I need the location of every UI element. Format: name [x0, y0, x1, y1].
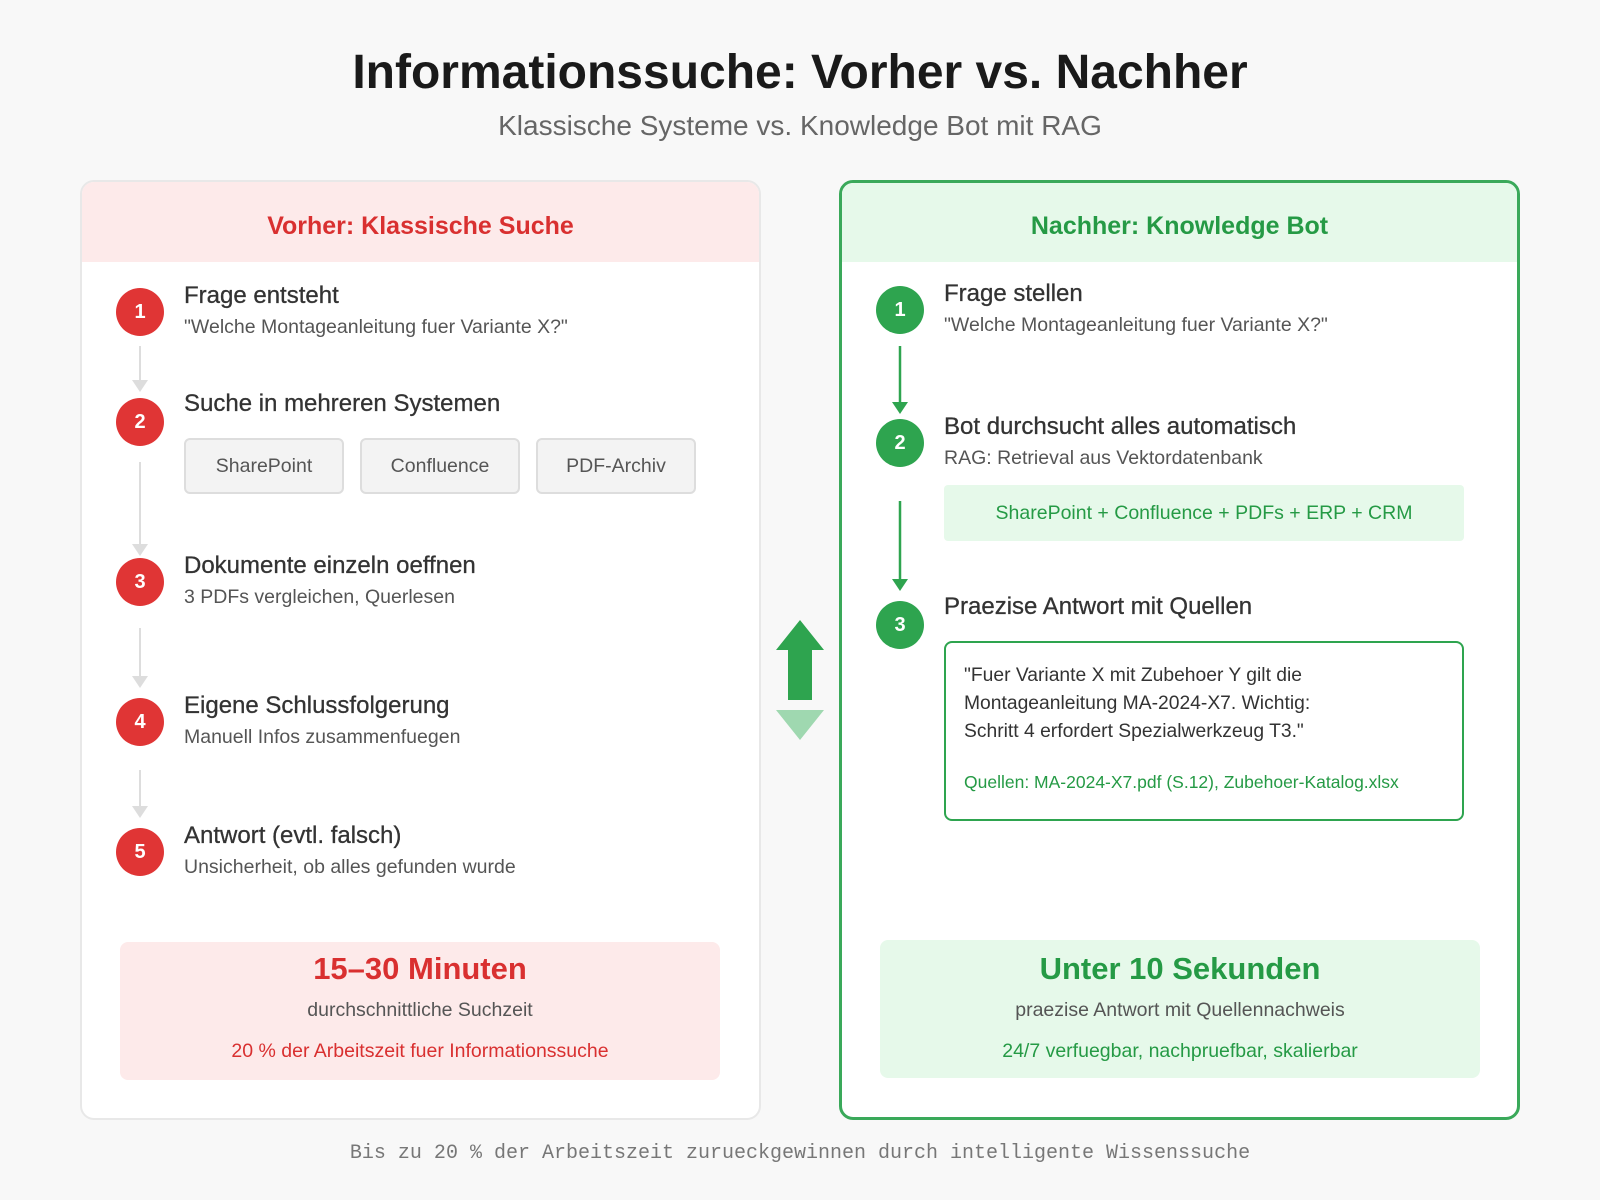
pills: SharePoint: [216, 455, 312, 477]
step 4: Eigene Schlussfolgerung: [184, 692, 450, 719]
header: vorher: Vorher: Klassische Suche: [267, 212, 574, 240]
step 2: Confluence: [391, 455, 489, 477]
step 2: Suche in mehreren Systemen: [184, 390, 500, 417]
answer box: "Fuer Variante X mit Zubehoer Y gilt die: [964, 665, 1302, 686]
title: Informationssuche: Vorher vs. Nachher: [352, 46, 1248, 99]
arrow 3-4: [132, 628, 148, 688]
step 3: 3: [894, 614, 906, 636]
step 2: 2: [134, 411, 146, 433]
step 2: 2: [894, 432, 906, 454]
step 1: 1: [894, 299, 906, 321]
step 2: RAG: Retrieval aus Vektordatenbank: [944, 447, 1263, 469]
step 5: Antwort (evtl. falsch): [184, 822, 401, 849]
step 3: 3 PDFs vergleichen, Querlesen: [184, 586, 455, 608]
step 4: Manuell Infos zusammenfuegen: [184, 726, 460, 748]
step 1: Frage stellen: [944, 280, 1083, 307]
panel: nachher: [839, 180, 1520, 1120]
step 2: PDF-Archiv: [566, 455, 666, 477]
step 3: Praezise Antwort mit Quellen: [944, 593, 1252, 620]
answer box: [944, 641, 1464, 821]
step 5: Unsicherheit, ob alles gefunden wurde: [184, 856, 516, 878]
header: vorher: [82, 182, 759, 262]
step 1: Frage entsteht: [184, 282, 339, 309]
summary box: nachher: [880, 940, 1480, 1078]
arrow 2-3: [132, 462, 148, 556]
summary box: nachher: 24/7 verfuegbar, nachpruefbar, skalierbar: [1002, 1040, 1358, 1062]
sources bar: SharePoint + Confluence + PDFs + ERP + CRM: [996, 502, 1412, 524]
summary box: vorher: durchschnittliche Suchzeit: [307, 999, 533, 1021]
step 5: 5: [134, 841, 146, 863]
step 1: "Welche Montageanleitung fuer Variante X?": [944, 314, 1328, 336]
step 4: 4: [134, 711, 146, 733]
arrow 2-3: [892, 501, 908, 591]
pills: [184, 438, 344, 494]
answer box: Schritt 4 erfordert Spezialwerkzeug T3.": [964, 721, 1304, 742]
arrow 1-2: [132, 346, 148, 392]
step 1: [876, 280, 1328, 336]
sources bar: [944, 485, 1464, 541]
answer box: Montageanleitung MA-2024-X7. Wichtig:: [964, 693, 1310, 714]
step 4: [116, 692, 460, 748]
step 1: 1: [134, 301, 146, 323]
answer box: Quellen: MA-2024-X7.pdf (S.12), Zubehoer-Katalog.xlsx: [964, 772, 1399, 792]
step 3: [876, 593, 1464, 821]
step 2: [876, 413, 1464, 541]
step 5: [116, 822, 516, 878]
footer: Bis zu 20 % der Arbeitszeit zurueckgewinnen durch intelligente Wissenssuche: [350, 1142, 1250, 1165]
step 2: Bot durchsucht alles automatisch: [944, 413, 1296, 440]
step 1: [116, 282, 568, 338]
subtitle: Klassische Systeme vs. Knowledge Bot mit RAG: [498, 110, 1102, 141]
arrow: comparison: [776, 620, 824, 740]
panel: vorher: [80, 180, 761, 1120]
header: nachher: [842, 182, 1517, 262]
step 3: [116, 552, 476, 608]
summary box: nachher: Unter 10 Sekunden: [1040, 951, 1320, 986]
step 2: [116, 390, 696, 494]
summary box: vorher: [120, 942, 720, 1080]
arrow 1-2: [892, 346, 908, 414]
step 1: "Welche Montageanleitung fuer Variante X?": [184, 316, 568, 338]
header: nachher: Nachher: Knowledge Bot: [1031, 212, 1328, 240]
step 3: Dokumente einzeln oeffnen: [184, 552, 476, 579]
summary box: vorher: 15–30 Minuten: [313, 951, 527, 986]
summary box: nachher: praezise Antwort mit Quellennachweis: [1015, 999, 1345, 1021]
step 3: 3: [134, 571, 146, 593]
arrow 4-5: [132, 770, 148, 818]
summary box: vorher: 20 % der Arbeitszeit fuer Informationssuche: [231, 1040, 609, 1062]
